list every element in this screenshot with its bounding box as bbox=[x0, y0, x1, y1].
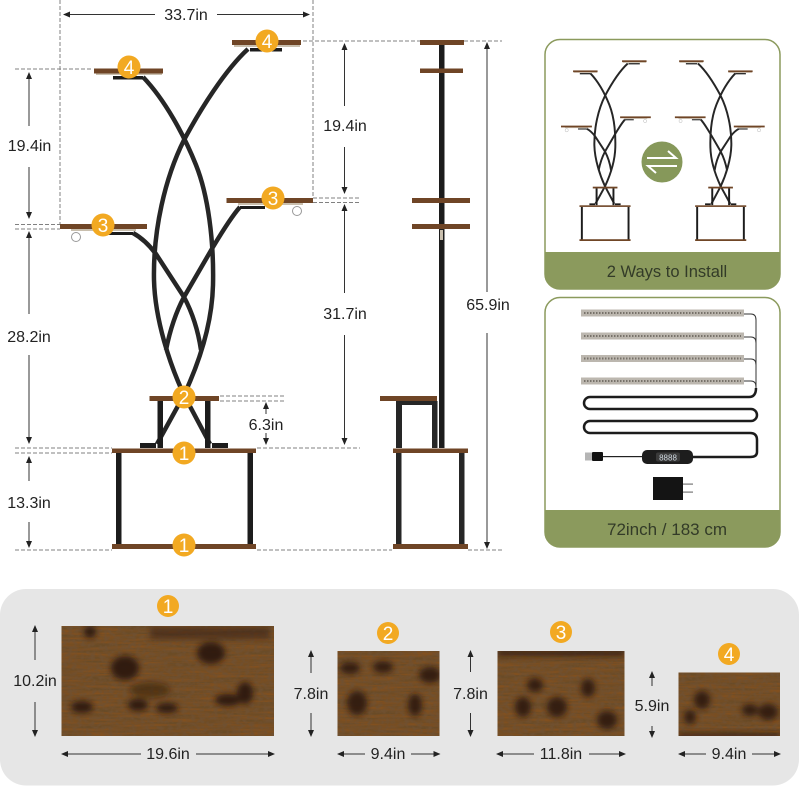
dimension: overall width 33.7in: 33.7in bbox=[164, 7, 208, 24]
wood swatch 2 bbox=[338, 651, 441, 736]
controller bbox=[642, 450, 693, 464]
number badges on front view: 1 bbox=[179, 444, 189, 465]
number badges on front view: 3 bbox=[98, 216, 108, 237]
wood swatch 1 bbox=[62, 626, 274, 736]
panel: 2 ways to install bbox=[544, 40, 781, 290]
LED strips bbox=[581, 310, 744, 384]
height 10.2in bbox=[13, 626, 57, 736]
width 9.4in bbox=[679, 746, 780, 763]
dimension: left 19.4in: 19.4in bbox=[8, 138, 51, 155]
number badges on front view: 1 bbox=[179, 536, 189, 557]
badge 2: 2 bbox=[383, 624, 393, 645]
mini plant: first orientation bbox=[561, 60, 651, 241]
height 7.8in: 7.8in bbox=[453, 686, 488, 703]
mini plant: mirrored orientation bbox=[675, 60, 765, 241]
serpentine cable bbox=[584, 388, 757, 457]
height 5.9in bbox=[635, 672, 669, 737]
width 11.8in: 11.8in bbox=[540, 746, 582, 763]
badge 3: 3 bbox=[556, 623, 566, 644]
front view: plant stand bbox=[60, 40, 313, 549]
strip connector wires bbox=[744, 314, 756, 390]
width 9.4in: 9.4in bbox=[712, 746, 746, 763]
dimension: 13.3in: 13.3in bbox=[7, 495, 51, 512]
dimension: 31.7in: 31.7in bbox=[323, 306, 367, 323]
badge 1: 1 bbox=[163, 597, 173, 618]
dimension: 28.2in: 28.2in bbox=[7, 329, 51, 346]
dimension: right 19.4in: 19.4in bbox=[323, 118, 367, 135]
controller: 8888 bbox=[659, 454, 677, 462]
dimension: 13.3in bbox=[7, 457, 51, 547]
width 19.6in: 19.6in bbox=[146, 746, 190, 763]
shelf 4 bbox=[635, 643, 780, 763]
badge 3 bbox=[550, 621, 572, 644]
dimension guide lines bbox=[15, 0, 503, 550]
number badges on front view: 4 bbox=[124, 58, 135, 79]
wood swatch 3 bbox=[498, 649, 624, 736]
badge 4: 4 bbox=[724, 645, 735, 666]
USB plug bbox=[585, 452, 643, 461]
footer band: install bbox=[544, 252, 781, 290]
number badges on front view: 3 bbox=[268, 189, 278, 210]
shelf 1 bbox=[13, 595, 274, 763]
shelf 3 bbox=[453, 621, 625, 763]
height 7.8in bbox=[294, 651, 328, 736]
panel: shelf sizes bbox=[0, 589, 799, 786]
number badges on front view bbox=[92, 30, 284, 557]
badge 4 bbox=[718, 643, 740, 666]
caption: length: 72inch / 183 cm bbox=[607, 520, 727, 539]
width 11.8in bbox=[497, 746, 625, 763]
shelf 2 bbox=[294, 622, 441, 763]
width 9.4in bbox=[338, 746, 440, 763]
badge 2 bbox=[377, 622, 399, 645]
dimension: 6.3in bbox=[249, 403, 283, 444]
badge 1 bbox=[157, 595, 179, 618]
side view: plant stand bbox=[380, 40, 470, 549]
dimension: total height 65.9in: 65.9in bbox=[466, 297, 510, 314]
wood swatch 4 bbox=[678, 672, 780, 738]
power adapter bbox=[653, 477, 693, 500]
height 5.9in: 5.9in bbox=[635, 698, 669, 715]
footer band: length bbox=[544, 510, 781, 548]
height 7.8in: 7.8in bbox=[294, 686, 328, 703]
height 10.2in: 10.2in bbox=[13, 673, 57, 690]
height 7.8in bbox=[453, 651, 488, 736]
caption: 2 ways to install: 2 Ways to Install bbox=[607, 263, 727, 281]
panel: LED grow lights bbox=[544, 298, 781, 548]
number badges on front view: 2 bbox=[179, 388, 189, 409]
width 9.4in: 9.4in bbox=[371, 746, 405, 763]
dimension: 6.3in: 6.3in bbox=[249, 417, 283, 434]
number badges on front view: 4 bbox=[262, 32, 273, 53]
icon: swap arrows bbox=[642, 142, 682, 182]
